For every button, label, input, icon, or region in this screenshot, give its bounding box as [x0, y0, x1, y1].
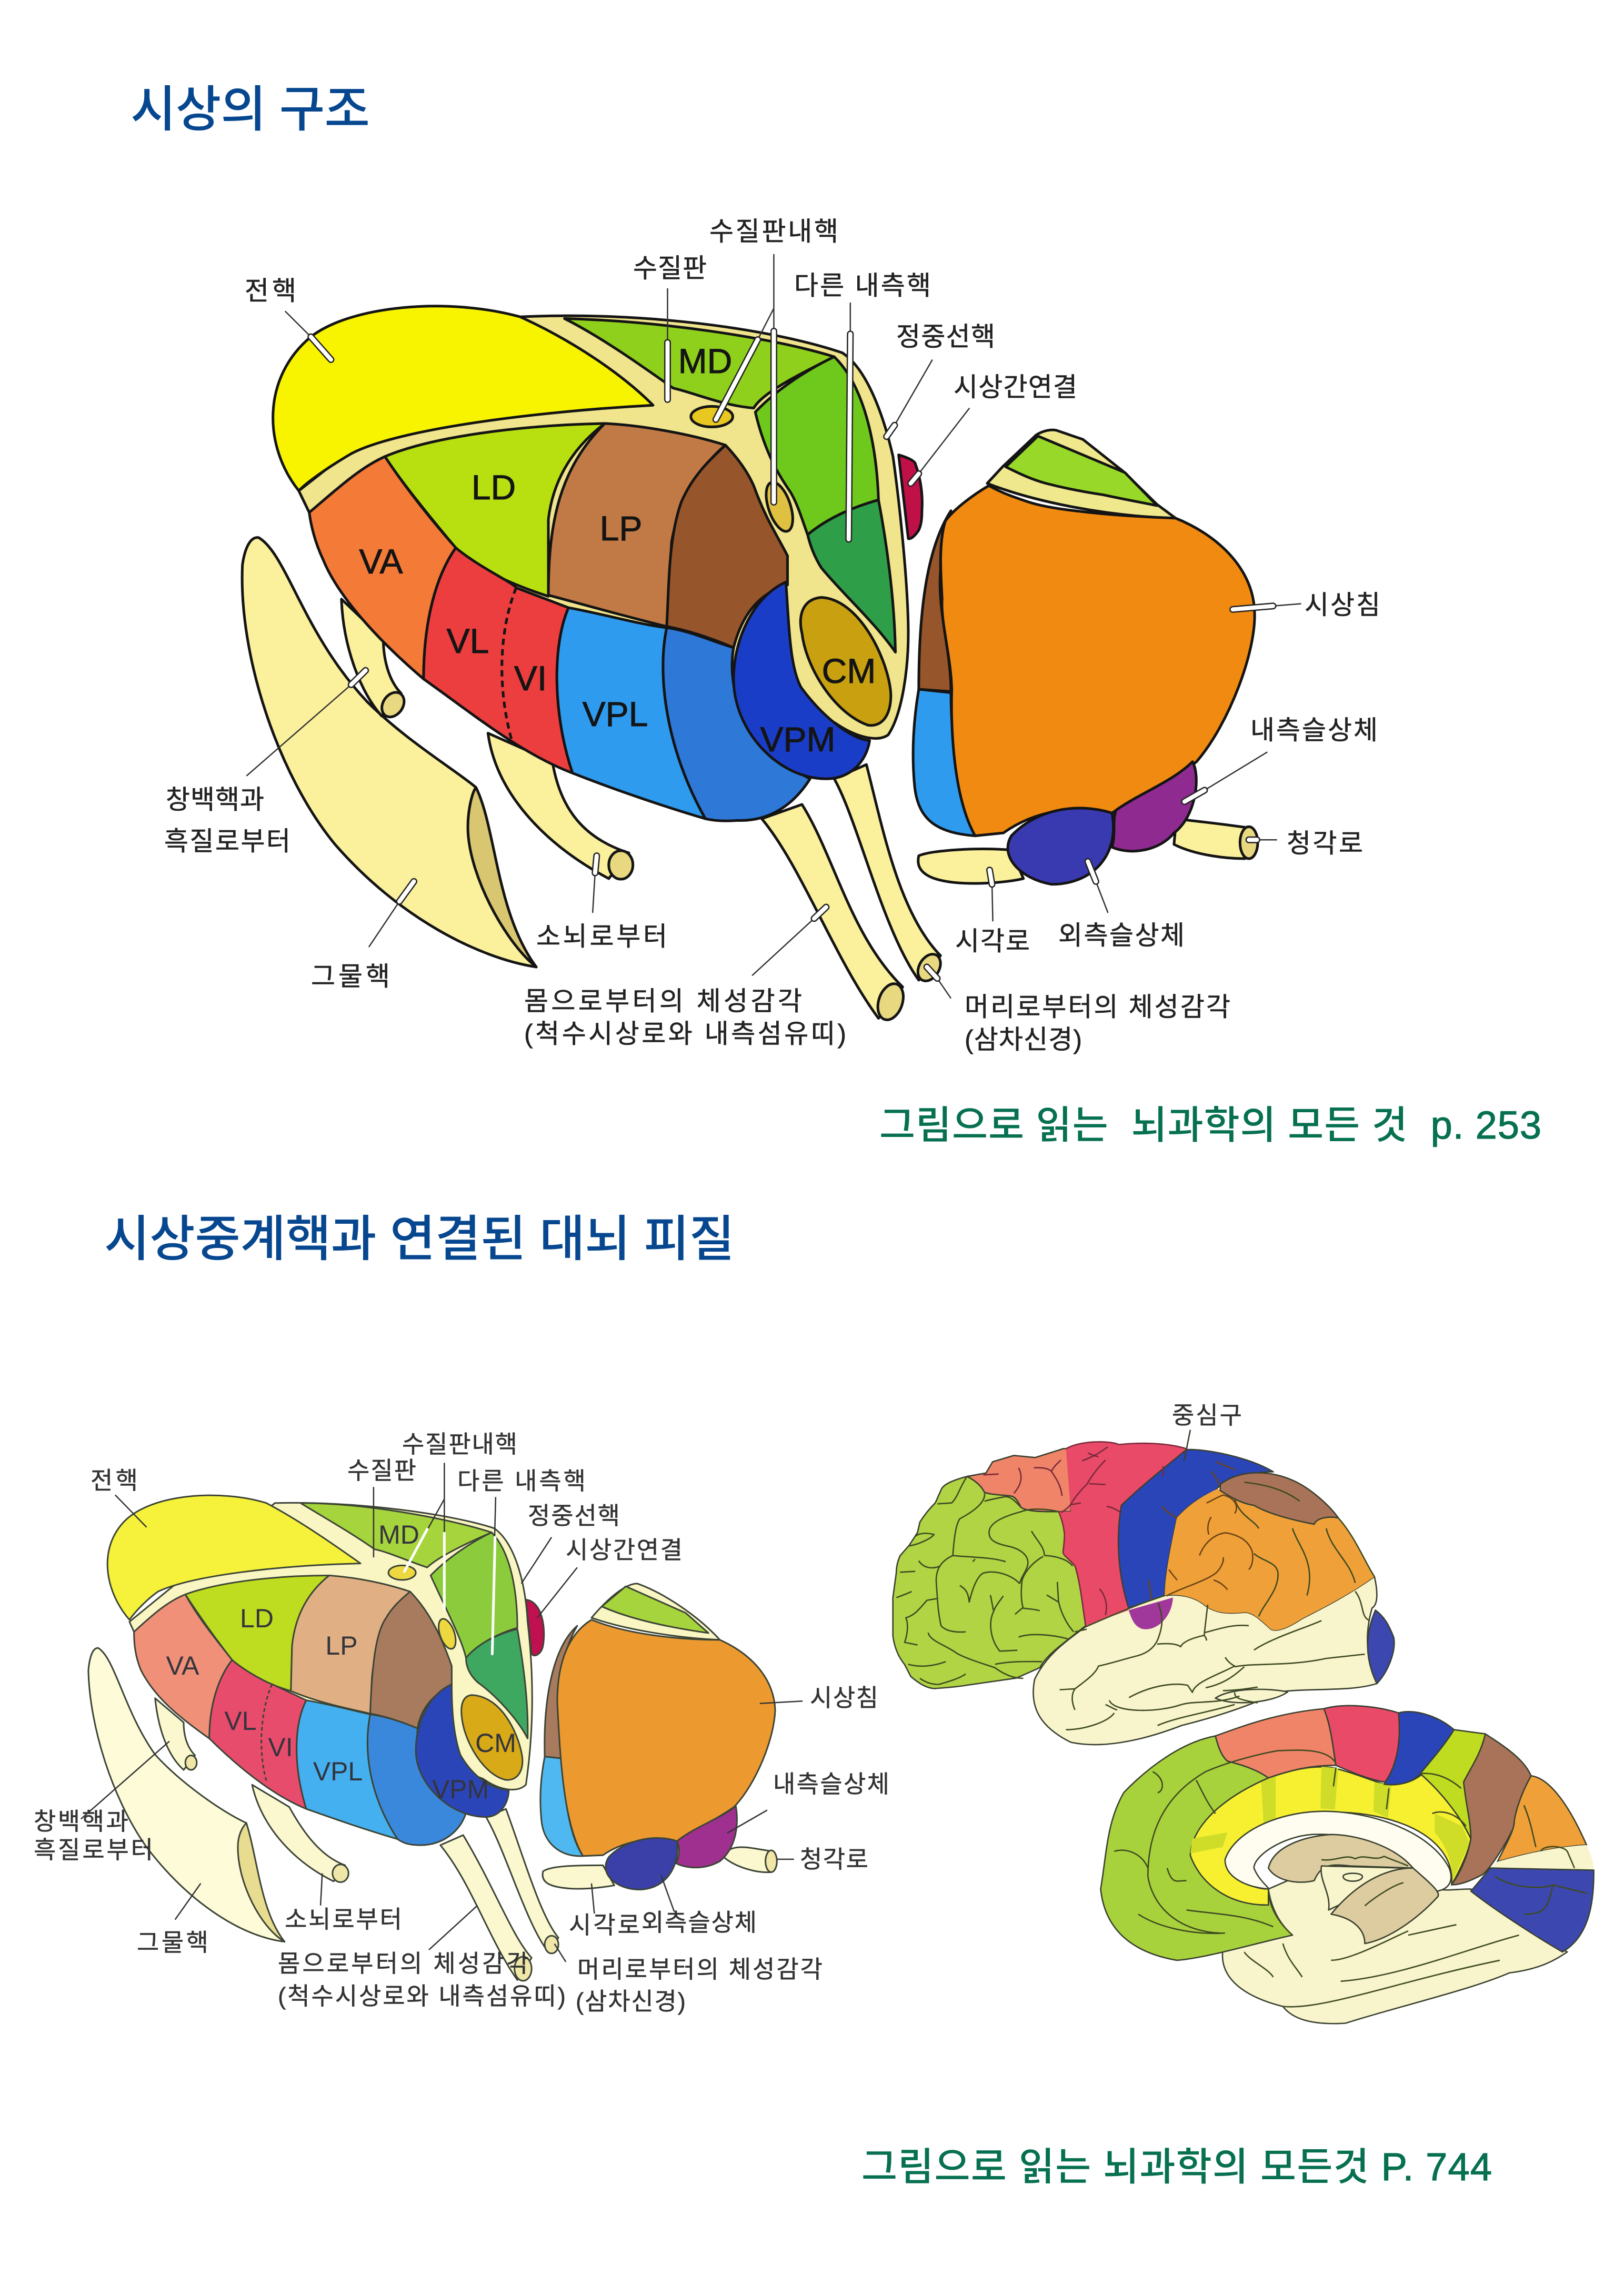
- labels: thalamus with cortical colour coding: 청각로: [800, 1846, 868, 1873]
- brown strip of pulvinar: [919, 511, 951, 691]
- intralaminar nucleus lower: [435, 1618, 459, 1650]
- labels: thalamus structure: 다른 내측핵: [794, 271, 931, 300]
- massa intermedia: [899, 455, 922, 539]
- labels: thalamus structure: CM: [822, 651, 876, 690]
- labels: thalamus structure: 수질판: [633, 254, 707, 283]
- blue strip of pulvinar: [540, 1757, 583, 1856]
- title: thalamus structure: 시상의 구조: [131, 82, 370, 137]
- posterior sulci: [1158, 1482, 1370, 1726]
- brown strip of pulvinar: [545, 1626, 577, 1759]
- labels: thalamus with cortical colour coding: 다른 내측핵: [457, 1467, 586, 1495]
- blue occipital pole: [1368, 1610, 1394, 1684]
- red motor region: [1059, 1442, 1187, 1626]
- lateral geniculate body: [1008, 808, 1114, 884]
- labels: thalamus structure: (척수시상로와 내측섬유띠): [524, 1019, 846, 1049]
- intralaminar nucleus upper: [691, 406, 733, 427]
- tract from head: [486, 1809, 558, 1953]
- motor and premotor sulci: [984, 1447, 1163, 1615]
- labels: thalamus structure: VPM: [760, 720, 836, 759]
- labels: thalamus with cortical colour coding: VL: [224, 1706, 257, 1736]
- labels: thalamus with cortical colour coding: 정중선핵: [528, 1502, 620, 1529]
- brown precuneus region: [1451, 1734, 1531, 1885]
- labels: thalamus with cortical colour coding: 내측슬상체: [773, 1770, 889, 1798]
- medial geniculate body: [676, 1806, 737, 1868]
- LD nucleus: [185, 1576, 329, 1691]
- internal medullary lamina: [129, 1503, 532, 1790]
- labels: thalamus structure: 외측슬상체: [1058, 921, 1185, 950]
- labels: thalamus with cortical colour coding: (척수시상로와 내측섬유띠): [278, 1982, 566, 2010]
- labels: thalamus structure: 전핵: [245, 276, 296, 306]
- intralaminar nucleus lower: [761, 480, 798, 533]
- prefrontal green region: [1101, 1736, 1292, 1960]
- tract from body: [762, 804, 907, 1021]
- lateral brain regions: [893, 1442, 1394, 1745]
- pulvinar: [557, 1620, 775, 1856]
- tract from head: [834, 764, 944, 983]
- VL VI dashed divider: [502, 588, 516, 742]
- tract from cerebellum: [252, 1785, 348, 1882]
- reticular nucleus: [88, 1648, 285, 1942]
- parietal sulci: [1167, 1495, 1253, 1596]
- labels: thalamus with cortical colour coding: [34, 1431, 889, 2015]
- brown region: [667, 445, 787, 648]
- labels: thalamus with cortical colour coding: 외측슬상체: [641, 1909, 757, 1936]
- labels: thalamus structure: MD: [678, 341, 732, 380]
- title: thalamic relay nuclei and connected cortex: 시상중계핵과 연결된 대뇌 피질: [104, 1211, 735, 1266]
- interthalamic oval: [1343, 1874, 1362, 1881]
- labels: thalamus with cortical colour coding: 몸으로부터의 체성감각: [278, 1950, 529, 1977]
- auditory tract: [1174, 819, 1258, 859]
- labels: thalamus with cortical colour coding: VI: [268, 1733, 293, 1762]
- tract from pallidum and substantia nigra: [155, 1698, 197, 1770]
- cream parietal-occipital band: [1490, 1845, 1594, 1870]
- somatosensory sulci: [1149, 1462, 1235, 1599]
- labels: thalamus with cortical colour coding: 머리로부터의 체성감각: [577, 1956, 823, 1983]
- blue strip of pulvinar: [913, 689, 975, 836]
- CM nucleus: [462, 1695, 523, 1780]
- medial sulci: [1114, 1750, 1587, 2007]
- orange parietal region: [1497, 1776, 1587, 1862]
- MD nucleus: [565, 318, 834, 408]
- VPL nucleus medial part: [663, 628, 810, 821]
- VA nucleus: [134, 1594, 232, 1738]
- VL and VI nuclei: [424, 548, 573, 773]
- frontal green region: [893, 1476, 1086, 1688]
- orange region outline: [1338, 1518, 1375, 1577]
- labels: thalamus with cortical colour coding: 시상간연결: [566, 1536, 683, 1564]
- LP nucleus: [291, 1576, 410, 1714]
- labels: thalamus with cortical colour coding: VA: [166, 1651, 199, 1680]
- labels: thalamus with cortical colour coding: MD: [378, 1520, 419, 1549]
- lower tan structure: [1331, 1868, 1438, 1943]
- labels: thalamus structure: 머리로부터의 체성감각: [965, 992, 1230, 1022]
- salmon premotor region: [967, 1449, 1071, 1512]
- source caption 1: 그림으로 읽는 뇌과학의 모든 것 p. 253: [879, 1103, 1541, 1147]
- diagram: thalamus structure: [242, 254, 1301, 1021]
- red motor region: [1324, 1706, 1399, 1782]
- cingulate lime bands: [1190, 1767, 1469, 1881]
- labels: thalamus structure: 시상침: [1305, 590, 1380, 620]
- internal medullary lamina: [299, 316, 908, 738]
- tract from pallidum and substantia nigra: [342, 599, 408, 719]
- blue somatosensory region: [1118, 1449, 1273, 1608]
- anterior nucleus: [107, 1495, 360, 1620]
- labels: thalamus structure: LD: [472, 468, 516, 507]
- pulvinar cap: [987, 430, 1176, 518]
- labels: thalamus structure: 소뇌로부터: [536, 922, 667, 951]
- labels: thalamus with cortical colour coding: (삼차신경): [576, 1988, 686, 2015]
- anterior sulci: [896, 1447, 1258, 1710]
- cingulate yellow region: [1190, 1767, 1471, 1905]
- labels: thalamus structure: 정중선핵: [896, 322, 995, 351]
- brain medial view: [1101, 1706, 1594, 2023]
- purple auditory region: [1129, 1598, 1173, 1629]
- medial geniculate body: [1112, 762, 1196, 851]
- labels: thalamus with cortical colour coding: VPL: [313, 1757, 363, 1786]
- sylvian fissure: [1085, 1596, 1165, 1627]
- pulvinar: [940, 486, 1255, 836]
- VL and VI nuclei: [209, 1660, 306, 1809]
- blue somatosensory region: [1384, 1711, 1454, 1785]
- leader lines: [81, 1463, 803, 1962]
- brain lateral view: [893, 1430, 1394, 1745]
- LP nucleus: [548, 424, 726, 627]
- lateral geniculate body: [606, 1838, 677, 1890]
- MD nucleus: [300, 1503, 492, 1567]
- other medial nuclei lower: [466, 1629, 528, 1738]
- pulvinar cap: [592, 1584, 720, 1640]
- tract from cerebellum: [488, 733, 633, 879]
- labels: thalamus structure: 시각로: [955, 927, 1030, 956]
- optic tract: [918, 849, 1024, 883]
- leader line to central sulcus: [1184, 1430, 1190, 1462]
- labels: thalamus with cortical colour coding: LP: [325, 1631, 358, 1660]
- brainstem and temporal cream region: [1222, 1868, 1567, 2023]
- VPL nucleus lateral part: [297, 1700, 397, 1839]
- labels: thalamus structure: 시상간연결: [954, 372, 1077, 402]
- LD nucleus: [385, 424, 605, 596]
- source caption 2: 그림으로 읽는 뇌과학의 모든것 P. 744: [861, 2145, 1492, 2189]
- diagram: thalamus with cortical colour coding: [81, 1463, 803, 1981]
- labels: thalamus structure: 흑질로부터: [164, 827, 290, 856]
- labels: thalamus structure: VL: [447, 621, 489, 660]
- labels: thalamus structure: VA: [359, 542, 403, 581]
- labels: thalamus with cortical colour coding: 창백핵과: [34, 1808, 128, 1835]
- labels: thalamus with cortical colour coding: 시상침: [810, 1684, 878, 1711]
- labels: thalamus with cortical colour coding: 수질판내핵: [402, 1431, 517, 1458]
- lime posterior cingulate region: [1420, 1730, 1485, 1839]
- anterior nucleus: [273, 306, 653, 491]
- labels: thalamus structure: [164, 217, 1380, 1054]
- labels: thalamus with cortical colour coding: 전핵: [91, 1467, 138, 1494]
- temporal sulci: [1060, 1603, 1258, 1710]
- VPM nucleus: [416, 1684, 509, 1817]
- corpus callosum: [1225, 1811, 1451, 1891]
- VPL nucleus lateral part: [557, 608, 705, 819]
- blue occipital region: [1471, 1868, 1594, 1952]
- VPL nucleus medial part: [367, 1714, 466, 1845]
- other medial nuclei upper: [755, 357, 878, 535]
- labels: thalamus with cortical colour coding: 시각로: [569, 1911, 640, 1939]
- labels: thalamus structure: 청각로: [1287, 829, 1363, 858]
- labels: thalamus structure: 내측슬상체: [1250, 716, 1378, 745]
- label: central sulcus: 중심구: [1172, 1402, 1242, 1429]
- reticular nucleus: [242, 538, 536, 967]
- CM nucleus: [800, 598, 891, 726]
- labels: thalamus structure: 몸으로부터의 체성감각: [524, 986, 802, 1016]
- labels: thalamus structure: 수질판내핵: [709, 217, 838, 246]
- labels: thalamus with cortical colour coding: LD: [240, 1604, 274, 1633]
- temporal cream region: [1033, 1577, 1377, 1745]
- labels: thalamus structure: 창백핵과: [166, 785, 264, 814]
- labels: thalamus with cortical colour coding: 수질판: [347, 1457, 416, 1484]
- labels: thalamus structure: VPL: [583, 694, 648, 733]
- lower temporal sulci: [1066, 1700, 1181, 1730]
- labels: thalamus with cortical colour coding: VPM: [432, 1775, 489, 1804]
- other medial nuclei upper: [430, 1533, 517, 1658]
- massa intermedia: [526, 1599, 544, 1656]
- labels: thalamus with cortical colour coding: 소뇌로부터: [285, 1906, 402, 1933]
- labels: thalamus structure: (삼차신경): [965, 1025, 1082, 1054]
- VA nucleus: [309, 457, 456, 679]
- upper tan structure: [1268, 1835, 1413, 1882]
- VL VI dashed divider: [262, 1684, 272, 1781]
- labels: thalamus structure: VI: [514, 659, 547, 698]
- orange parietal region: [1165, 1488, 1375, 1630]
- auditory tract: [721, 1847, 777, 1872]
- red region outline: [1059, 1442, 1187, 1626]
- labels: thalamus structure: LP: [600, 509, 642, 548]
- labels: thalamus with cortical colour coding: CM: [475, 1728, 516, 1758]
- lower lobe fragment: [1216, 1689, 1288, 1703]
- optic tract: [543, 1865, 614, 1889]
- intralaminar nucleus upper: [388, 1565, 416, 1580]
- salmon premotor region: [1216, 1709, 1336, 1778]
- tract from body: [440, 1835, 532, 1981]
- frontal sulci: [896, 1477, 1087, 1685]
- VPM nucleus: [734, 582, 870, 779]
- labels: thalamus with cortical colour coding: 흑질로부터: [34, 1836, 153, 1864]
- labels: thalamus with cortical colour coding: 그물핵: [137, 1929, 208, 1956]
- brown region: [370, 1592, 452, 1728]
- leader lines: [246, 254, 1301, 999]
- labels: thalamus structure: 그물핵: [311, 962, 390, 991]
- brown superior parietal region: [1220, 1473, 1338, 1524]
- other medial nuclei lower: [808, 500, 895, 652]
- diencephalon centre: [1321, 1866, 1404, 1910]
